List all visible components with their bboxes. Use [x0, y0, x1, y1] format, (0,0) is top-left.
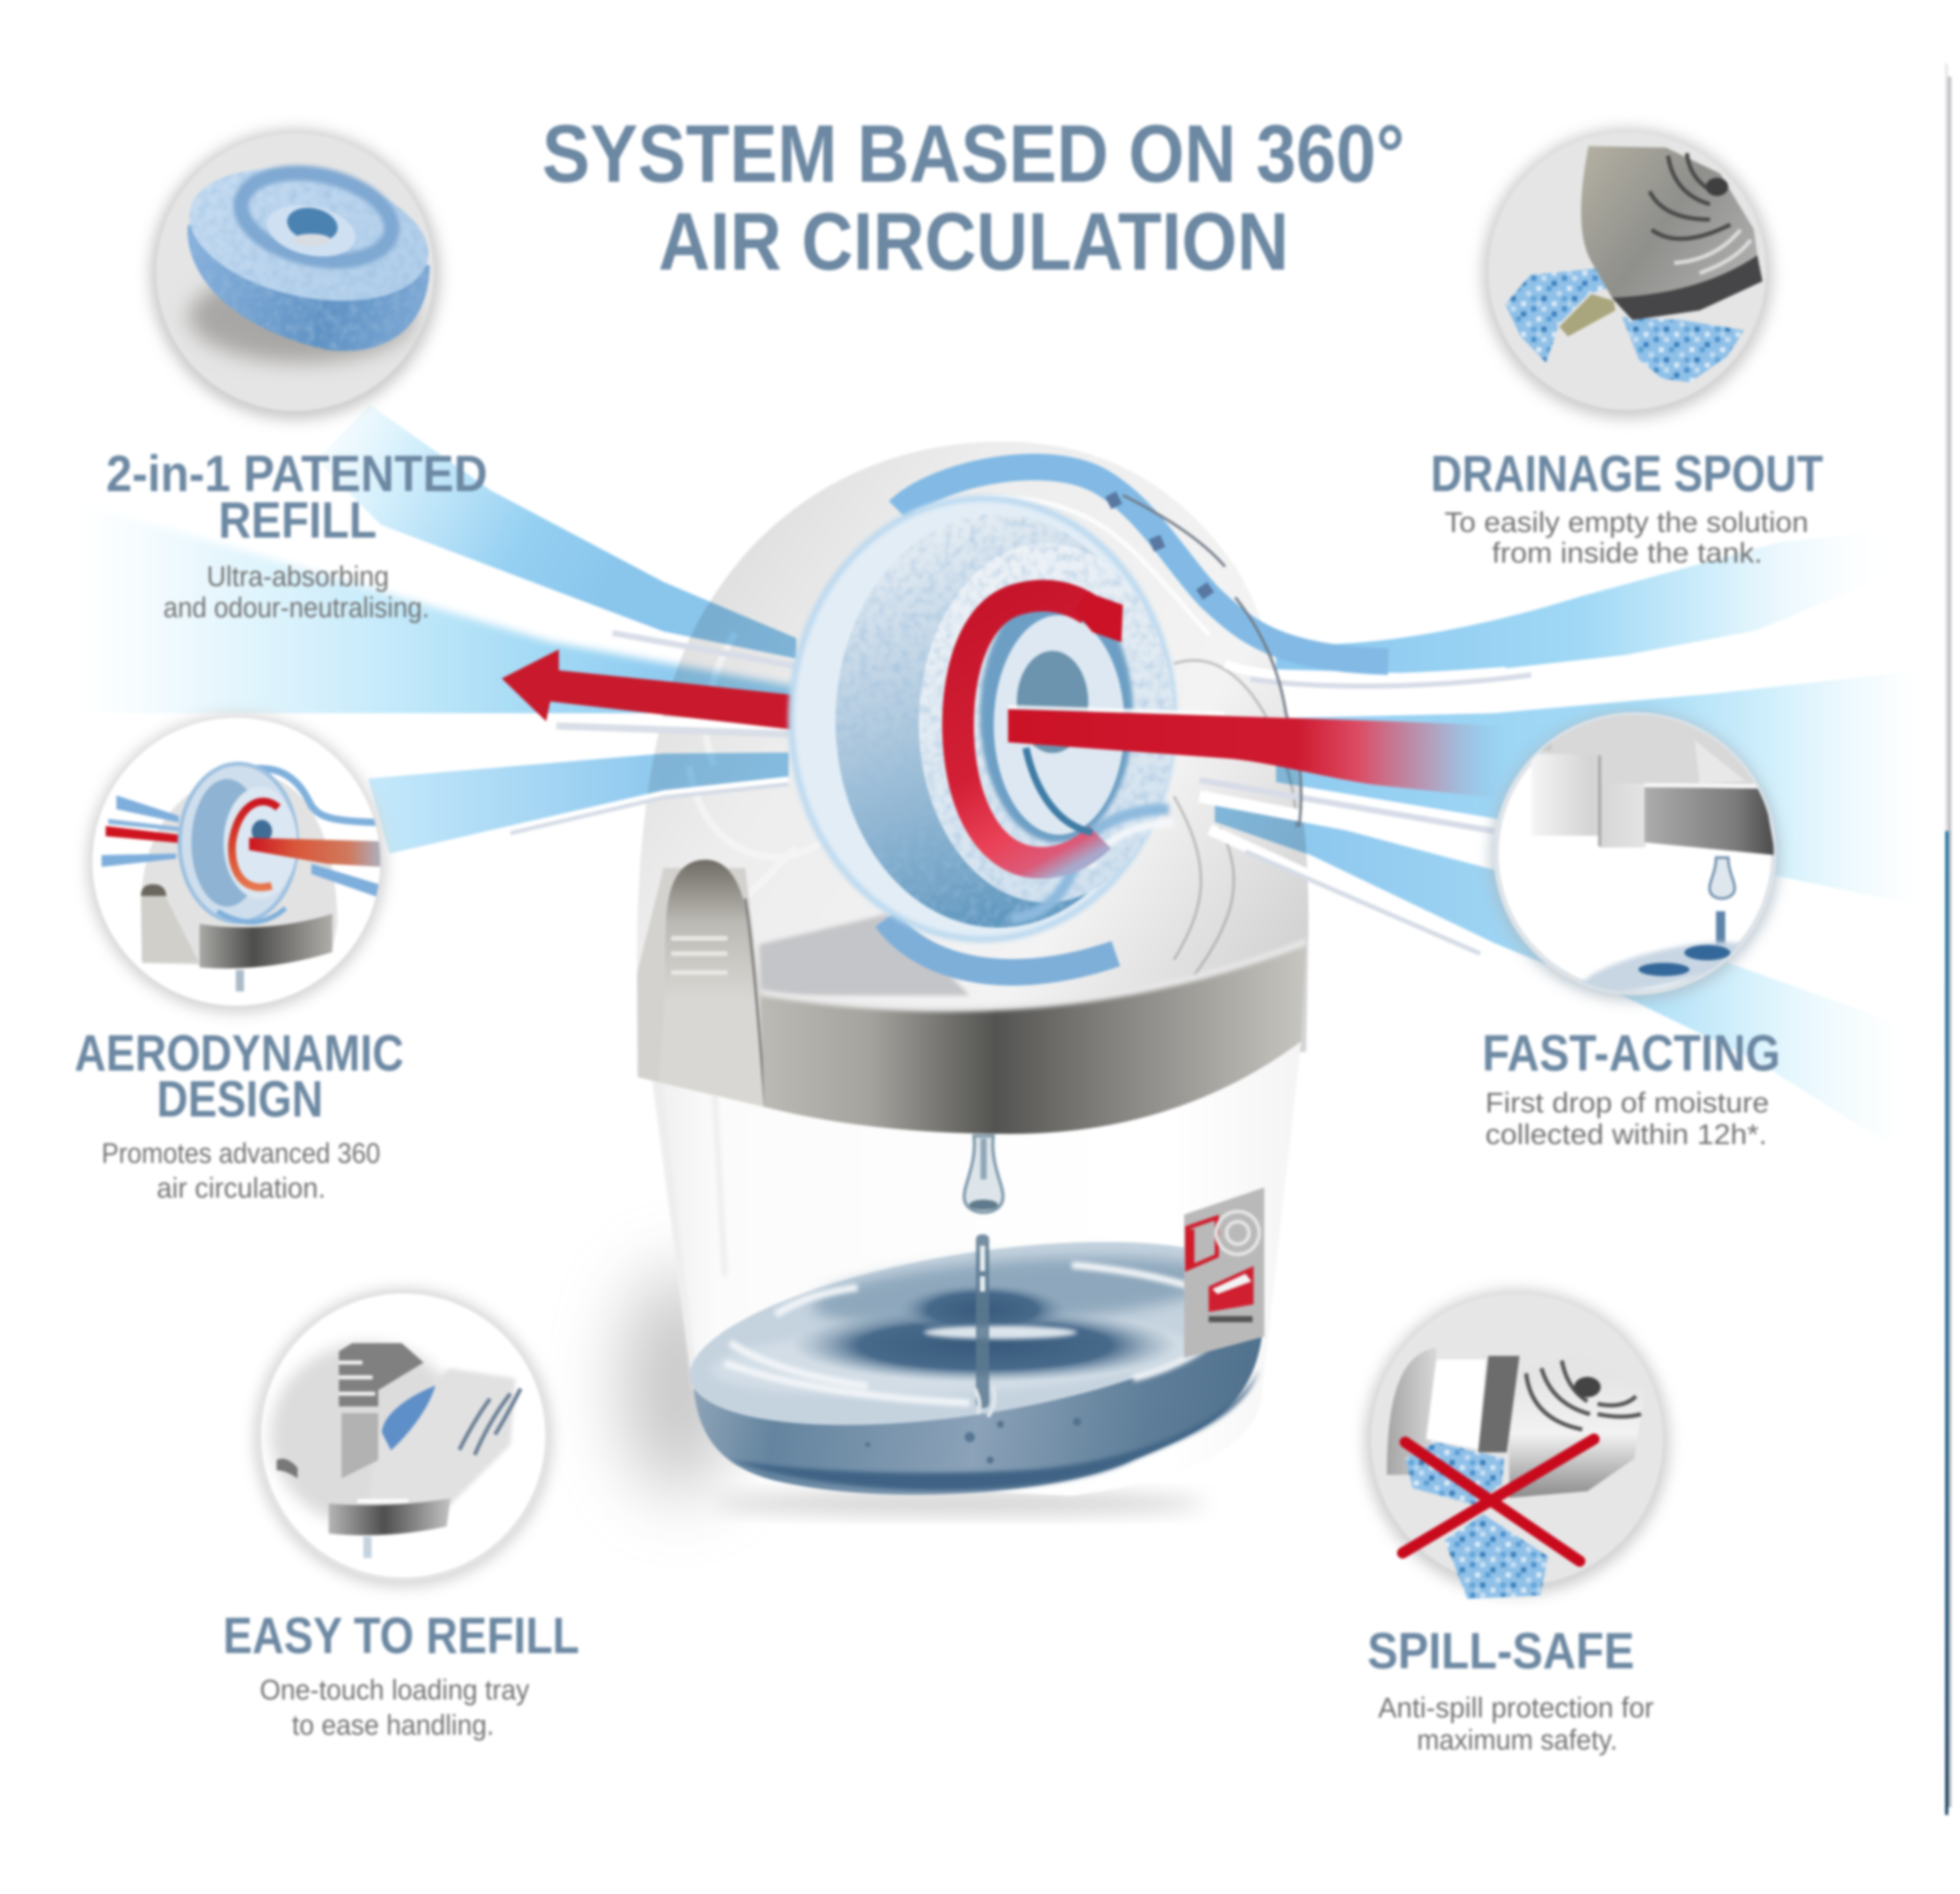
- stream: middle left: [132, 526, 793, 715]
- feature: 2-in-1 patented refill: [106, 130, 487, 623]
- red outflow arrow right: [1008, 709, 1511, 799]
- feature: aerodynamic design: [75, 715, 404, 1204]
- grey collar band: [761, 942, 1306, 1134]
- feature: drainage spout: [1431, 129, 1823, 569]
- air flow streams: [132, 406, 1881, 1121]
- title: [542, 108, 1405, 287]
- icon: refill puck: [150, 130, 440, 420]
- dome shaded lower section: [759, 914, 970, 995]
- red outflow arrow left: [502, 649, 796, 730]
- description: and odour-neutralising.: [163, 591, 429, 623]
- blue swirl around refill: [886, 467, 1388, 973]
- heading: DESIGN: [157, 1071, 323, 1128]
- stream: lower left: [368, 752, 789, 854]
- dome: [637, 442, 1309, 1108]
- water surface with ripples: [677, 1209, 1272, 1458]
- description: [102, 1137, 380, 1204]
- heading: AERODYNAMIC: [75, 1025, 404, 1082]
- description: Promotes advanced 360: [102, 1137, 380, 1169]
- description: maximum safety.: [1417, 1723, 1618, 1756]
- feature: fast-acting: [1482, 710, 1780, 1150]
- icon: open loading tray: [254, 1289, 552, 1587]
- red circulation arrow: [958, 596, 1100, 863]
- heading: [75, 1025, 404, 1128]
- description: To easily empty the solution: [1444, 506, 1808, 538]
- icon: drainage spout: [1482, 129, 1772, 419]
- heading: EASY TO REFILL: [223, 1607, 579, 1664]
- description: [1444, 506, 1808, 569]
- title: SYSTEM BASED ON 360°: [542, 108, 1405, 199]
- description: air circulation.: [157, 1172, 326, 1204]
- description: [163, 560, 429, 623]
- right pinch in wheel: [1011, 809, 1169, 919]
- stream: middle right: [1276, 669, 1960, 914]
- right edge rule: [1945, 64, 1951, 1815]
- heading: DRAINAGE SPOUT: [1431, 445, 1823, 502]
- tank label: [1184, 1187, 1264, 1358]
- description: collected within 12h*.: [1485, 1118, 1767, 1150]
- white flow streaks: [393, 633, 1633, 1016]
- bubbles in water: [865, 1418, 1081, 1464]
- description: First drop of moisture: [1485, 1086, 1769, 1119]
- description: to ease handling.: [292, 1709, 494, 1741]
- falling water drops: [964, 1136, 1003, 1417]
- refill cartridge wheel: [791, 498, 1511, 939]
- inner channel: [980, 587, 1133, 842]
- heading: [106, 445, 487, 549]
- stream: upper right: [1276, 526, 1919, 674]
- title: AIR CIRCULATION: [658, 196, 1289, 287]
- description: One-touch loading tray: [260, 1673, 529, 1706]
- water body: [693, 1307, 1262, 1495]
- icon: spill crossed out: [1365, 1290, 1669, 1599]
- wheel front face: [919, 543, 1174, 903]
- feature: easy to refill: [223, 1289, 579, 1741]
- description: Anti-spill protection for: [1378, 1691, 1654, 1723]
- description: [1485, 1086, 1769, 1150]
- description: [1378, 1691, 1654, 1756]
- heading: FAST-ACTING: [1482, 1025, 1780, 1082]
- heading: REFILL: [218, 492, 377, 549]
- heading: SPILL-SAFE: [1367, 1622, 1634, 1680]
- ground shadow: [623, 1271, 1205, 1515]
- product: dehumidifier body: [637, 442, 1309, 1496]
- feature: spill-safe: [1365, 1290, 1669, 1756]
- stream: lower right: [1215, 802, 1960, 1144]
- description: Ultra-absorbing: [207, 560, 389, 592]
- icon: band and falling drop: [1491, 710, 1779, 1003]
- cartridge hole: [1017, 651, 1088, 753]
- stream: upper left: [316, 405, 796, 659]
- transparent tank: [652, 1041, 1301, 1496]
- description: from inside the tank.: [1492, 537, 1762, 569]
- left panel with arch: [637, 868, 764, 1107]
- icon: mini product with flows: [87, 715, 385, 1013]
- wheel side wall: [836, 514, 1160, 928]
- outer translucent rim: [791, 498, 1174, 939]
- heading: 2-in-1 PATENTED: [106, 445, 487, 502]
- description: [260, 1673, 529, 1741]
